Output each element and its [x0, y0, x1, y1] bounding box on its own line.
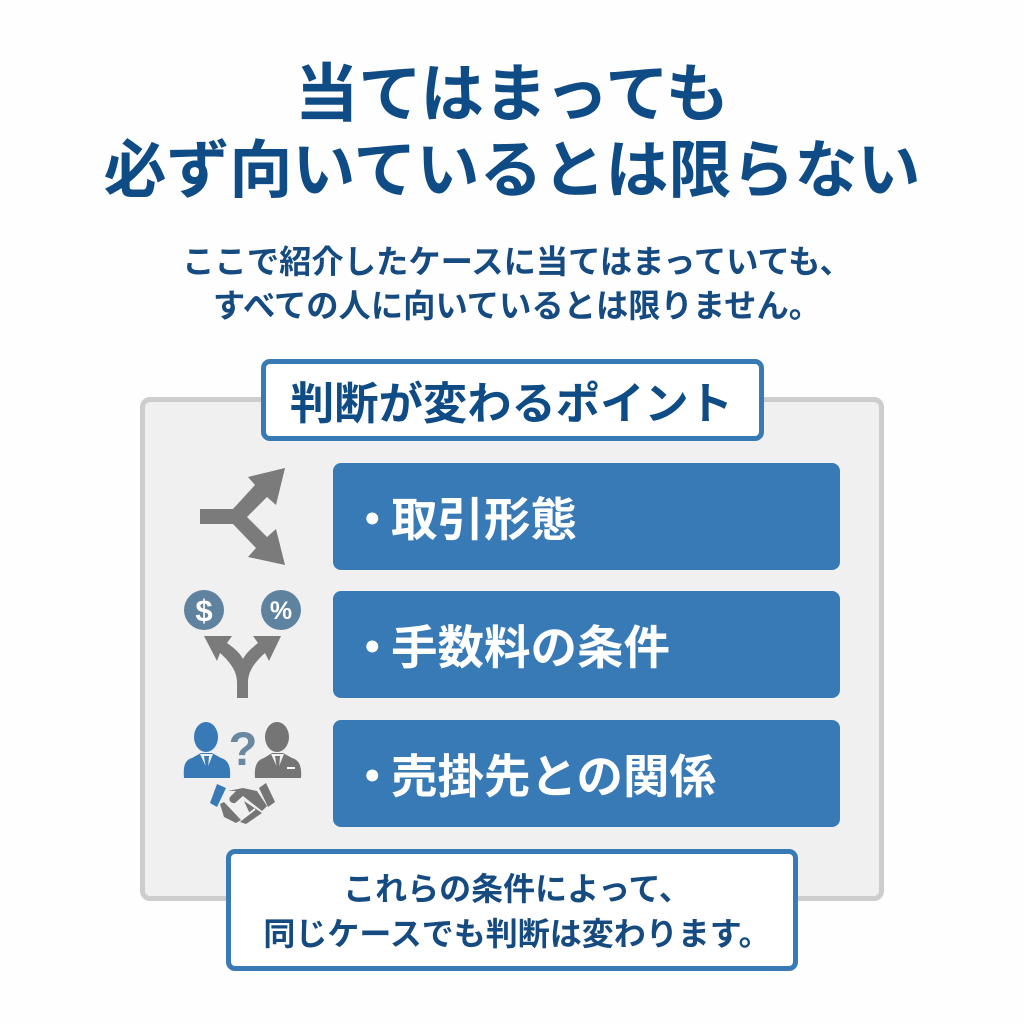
icon: people and handshake: ?	[229, 722, 257, 775]
row: relationship with seller: ・	[349, 751, 396, 803]
icon: dollar and percent fork: $	[195, 593, 213, 628]
callout: これらの条件によって、	[343, 871, 691, 907]
subtitle text: すべての人に向いているとは限りません。	[213, 288, 821, 324]
icon: people and handshake	[184, 722, 302, 824]
row: relationship with seller: 売掛先との関係	[391, 751, 716, 803]
row: fee conditions: ・	[349, 622, 396, 674]
subtitle text: ここで紹介したケースに当てはまっていても、	[182, 244, 852, 280]
row: fee conditions: 手数料の条件	[391, 622, 670, 674]
subtitle text	[182, 244, 852, 324]
callout	[226, 849, 798, 971]
panel heading: 判断が変わるポイント	[290, 380, 733, 429]
row: transaction form: ・	[349, 494, 396, 546]
icon: dollar and percent fork: %	[270, 597, 292, 625]
row: transaction form: 取引形態	[391, 494, 577, 546]
title line 1: 当てはまっても	[295, 60, 729, 130]
callout: 同じケースでも判断は変わります。	[263, 916, 771, 952]
icon: branching arrows	[200, 468, 285, 565]
panel: decision points	[140, 397, 884, 901]
title line 2: 必ず向いているとは限らない	[103, 136, 921, 206]
row: transaction form	[333, 463, 840, 570]
row: relationship with seller	[333, 720, 840, 827]
icon: dollar and percent fork	[184, 590, 301, 698]
row: fee conditions	[333, 591, 840, 698]
panel heading	[261, 359, 764, 441]
